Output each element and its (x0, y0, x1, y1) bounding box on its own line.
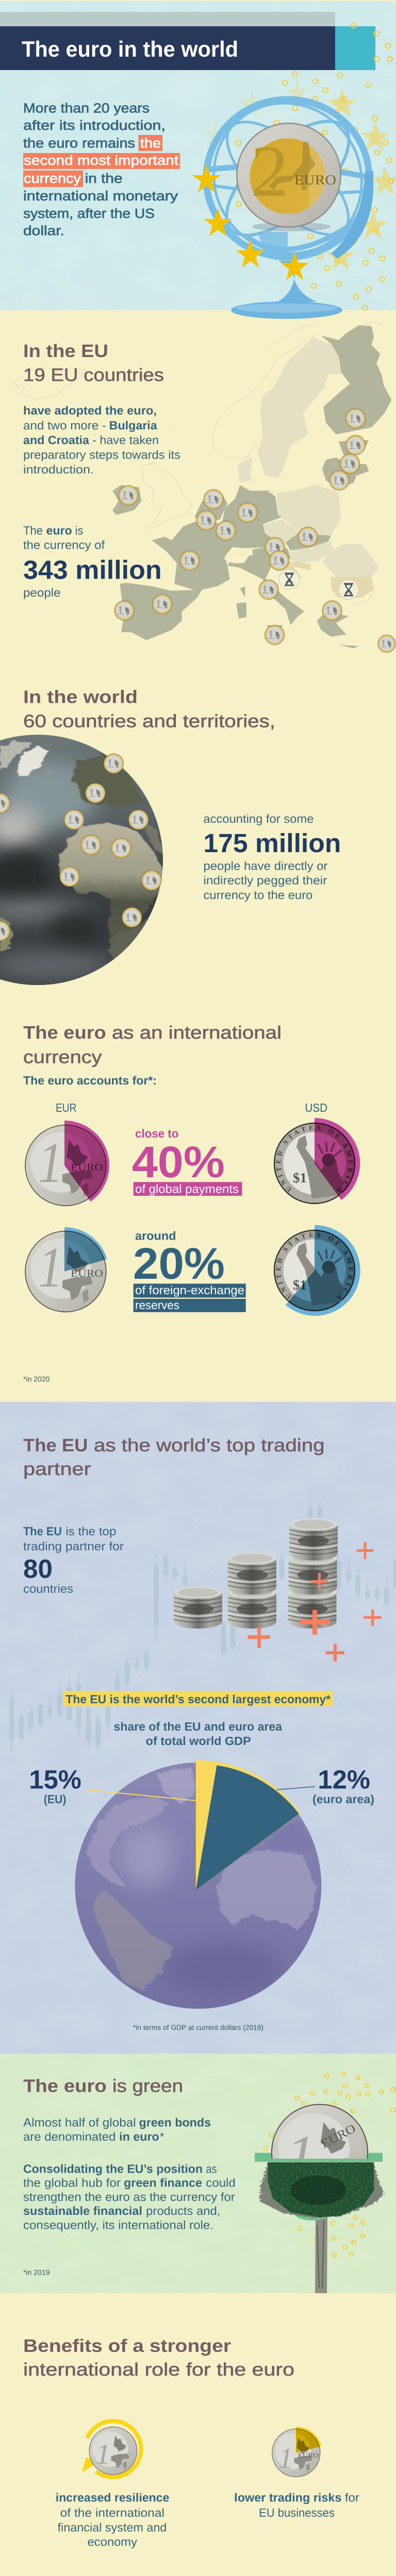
chart: euro coin 40 percent: 1 (38, 1131, 63, 1195)
icon: two euro coin: 2 (251, 130, 289, 212)
footnote: in 2019: *in 2019 (23, 2268, 50, 2277)
stat: 175 million people: accounting for some (203, 812, 314, 825)
benefit: lower trading risks (234, 2427, 359, 2519)
text block: green bonds: green bonds (139, 2116, 211, 2129)
illustration: coin on armillary globe (185, 23, 396, 319)
title banner (0, 12, 375, 70)
text block: green bonds: in euro (119, 2130, 159, 2143)
stat: top trading partner for 80 countries: countries (23, 1582, 73, 1596)
illustration: growing coin stacks (174, 1518, 382, 1662)
panel: benefits background (0, 2293, 396, 2576)
text block: euro adoption: - have taken (92, 433, 159, 447)
icon: two euro coin: EURO (294, 172, 336, 188)
text block: green bonds (23, 2116, 211, 2143)
panel: green background (0, 2054, 396, 2293)
text block: green finance hub: the global hub for (23, 2176, 121, 2190)
stat: 12 percent euro area: (euro area) (312, 1792, 374, 1806)
text block: green bonds: are denominated (23, 2130, 116, 2143)
stat: 343 million people: The (23, 523, 43, 537)
stat: top trading partner for 80 countries: The EU (23, 1524, 62, 1538)
heading: in the EU: In the EU (23, 341, 108, 361)
text block: intro (23, 100, 180, 239)
chart: dollar coin 40 percent: UNITED STATES OF AMERICA (276, 1125, 353, 1192)
heading: in the world (23, 687, 275, 732)
chart: euro coin 20 percent: EURO (71, 1268, 103, 1279)
heading: EU as top trading partner: as the world’s top trading (94, 1435, 325, 1455)
text block: green finance hub: products and, (146, 2204, 220, 2217)
chart: dollar coin 60 percent: UNITED STATES OF AMERICA (276, 1232, 353, 1299)
text block: green finance hub: could (206, 2176, 236, 2190)
illustration: euro coin tree: EURO (319, 2122, 358, 2151)
stat: top trading partner for 80 countries (23, 1524, 124, 1596)
chart: euro coin 40 percent: EURO (71, 1162, 103, 1173)
heading: euro as international currency: currency (23, 1047, 102, 1067)
label: USD: USD (305, 1101, 327, 1114)
icon: coin with yellow wedge: 1 (278, 2443, 293, 2475)
leader line: 15 percent (86, 1790, 196, 1801)
stat: 343 million people: people (23, 586, 61, 599)
stat: around 20 percent of foreign-exchange reserves: around (135, 1229, 176, 1242)
illustration: earth with euro coins (0, 735, 164, 985)
stat: 175 million people: indirectly pegged their (203, 874, 327, 887)
callout: second largest economy: The EU is the world’s second largest economy* (65, 1692, 331, 1706)
benefit: increased resilience (56, 2421, 169, 2549)
text block: euro adoption: have adopted the euro, (23, 403, 157, 417)
heading: benefits (23, 2336, 294, 2380)
text block: intro: the (140, 135, 161, 151)
footnote: GDP basis: *in terms of GDP at current dollars (2019) (133, 2023, 263, 2031)
text block: green finance hub: strengthen the euro as the currency for (23, 2190, 235, 2204)
heading: the euro is green: is green (112, 2076, 183, 2096)
stat: around 20 percent of foreign-exchange reserves (133, 1229, 246, 1312)
chart: euro coin 20 percent: 1 (38, 1235, 63, 1299)
text block: green bonds: * (160, 2130, 164, 2143)
label: EUR: EUR (56, 1101, 76, 1114)
stat: close to 40 percent of global payments: of global payments (135, 1182, 239, 1196)
subheading: euro accounts for: The euro accounts for*: (23, 1074, 157, 1087)
stat: close to 40 percent of global payments: close to (135, 1127, 178, 1140)
heading: the euro is green (23, 2076, 183, 2096)
heading: in the EU (23, 341, 164, 385)
text block: intro: More than 20 years (23, 100, 150, 116)
heading: the euro is green: The euro (23, 2076, 107, 2096)
stat: top trading partner for 80 countries: is the top (65, 1524, 116, 1538)
stat: 175 million people: 175 million (203, 828, 341, 858)
stat: 343 million people (23, 523, 162, 599)
benefit: lower trading risks: for (345, 2491, 359, 2504)
stat: around 20 percent of foreign-exchange reserves: 20% (133, 1239, 225, 1289)
benefit: lower trading risks: EU businesses (259, 2506, 335, 2519)
subheading: share of world GDP (113, 1720, 282, 1748)
illustration: euro coin tree: 1 (287, 2124, 315, 2187)
background chart: candlesticks (12, 1492, 396, 1754)
text block: euro adoption (23, 403, 180, 476)
icon: coin with yellow wedge (272, 2427, 322, 2477)
panel: trade background (0, 1402, 396, 2054)
heading: euro as international currency: as an international (112, 1023, 282, 1043)
text block: intro: in the (85, 171, 123, 186)
chart: dollar coin 60 percent: $1 (293, 1277, 307, 1293)
text block: green finance hub: Consolidating the EU’s position (23, 2162, 203, 2176)
panel: cream background EU and world (0, 310, 396, 1402)
chart: euro coin 20 percent (25, 1227, 107, 1312)
stat: close to 40 percent of global payments: 40% (132, 1138, 225, 1187)
benefit: increased resilience: financial system and (58, 2520, 167, 2534)
heading: in the world: In the world (23, 687, 138, 707)
text block: intro: dollar. (23, 223, 64, 239)
stat: top trading partner for 80 countries: 80 (23, 1554, 53, 1583)
icon: coin with circular arrow (82, 2421, 141, 2477)
subheading: share of world GDP: of total world GDP (146, 1734, 251, 1748)
stat: 343 million people: euro (46, 523, 72, 537)
heading: benefits: Benefits of a stronger (23, 2336, 231, 2356)
stat: top trading partner for 80 countries: trading partner for (23, 1539, 124, 1553)
text block: intro: currency (24, 171, 81, 186)
text block: green finance hub: consequently, its international role. (23, 2218, 213, 2232)
text block: green bonds: Almost half of global (23, 2116, 136, 2129)
stat: 12 percent euro area (312, 1765, 374, 1806)
benefit: increased resilience: increased resilience (56, 2491, 169, 2504)
text block: euro adoption: preparatory steps towards its (23, 448, 180, 462)
pie chart: EU and euro area share of GDP on globe (75, 1760, 321, 2009)
icon: two euro coin (236, 123, 341, 228)
icon: coin with yellow wedge: EURO (298, 2451, 319, 2459)
stat: around 20 percent of foreign-exchange reserves: of foreign-exchange (135, 1283, 244, 1297)
text block: euro adoption: Bulgaria (109, 418, 157, 432)
subheading: share of world GDP: share of the EU and euro area (113, 1720, 282, 1733)
text block: euro adoption: and Croatia (23, 433, 89, 447)
title: The euro in the world (22, 37, 238, 62)
footnote: in 2020: *in 2020 (23, 1375, 50, 1383)
text block: intro: the euro remains (23, 135, 135, 151)
stat: 175 million people: currency to the euro (203, 888, 312, 902)
stat: 175 million people (203, 812, 341, 902)
text block: euro adoption: and two more - (23, 418, 106, 432)
chart: euro coin 40 percent (25, 1121, 109, 1206)
stat: 343 million people: 343 million (23, 555, 162, 584)
stat: around 20 percent of foreign-exchange reserves: reserves (135, 1298, 179, 1312)
heading: euro as international currency (23, 1023, 282, 1067)
heading: EU as top trading partner: The EU (23, 1435, 88, 1455)
text block: green finance hub: as (206, 2162, 217, 2176)
panel: hero background (0, 0, 396, 310)
benefit: increased resilience: of the international (60, 2506, 164, 2519)
stat: 343 million people: is (75, 523, 84, 537)
stat: 175 million people: people have directly or (203, 859, 328, 873)
text block: green finance hub: green finance (124, 2176, 202, 2190)
stat: close to 40 percent of global payments (132, 1127, 242, 1196)
text block: intro: after its introduction, (23, 117, 166, 133)
heading: EU as top trading partner (23, 1435, 325, 1479)
text block: intro: second most important (24, 152, 179, 168)
stat: 343 million people: the currency of (23, 538, 105, 551)
illustration: euro coin tree (255, 2072, 395, 2293)
heading: benefits: international role for the euro (23, 2360, 294, 2380)
map: Europe with euro area countries (12, 321, 396, 653)
text block: intro: international monetary (23, 188, 178, 204)
leader line: 12 percent (276, 1787, 315, 1790)
heading: in the EU: 19 EU countries (23, 365, 164, 385)
benefit: increased resilience: economy (88, 2535, 138, 2549)
text block: green finance hub (23, 2162, 236, 2232)
text block: green finance hub: sustainable financial (23, 2204, 142, 2217)
text block: intro: system, after the US (23, 206, 155, 221)
icon: coin with circular arrow: 1 (96, 2438, 110, 2470)
benefit: lower trading risks: lower trading risks (234, 2491, 341, 2504)
stat: 12 percent euro area: 12% (318, 1765, 370, 1794)
heading: EU as top trading partner: partner (23, 1459, 91, 1479)
stat: 15 percent EU: 15% (29, 1765, 81, 1794)
stat: 15 percent EU: (EU) (44, 1792, 66, 1806)
text block: euro adoption: introduction. (23, 463, 94, 476)
heading: euro as international currency: The euro (23, 1023, 106, 1043)
heading: in the world: 60 countries and territories, (23, 711, 275, 732)
chart: dollar coin 40 percent: $1 (293, 1170, 307, 1185)
